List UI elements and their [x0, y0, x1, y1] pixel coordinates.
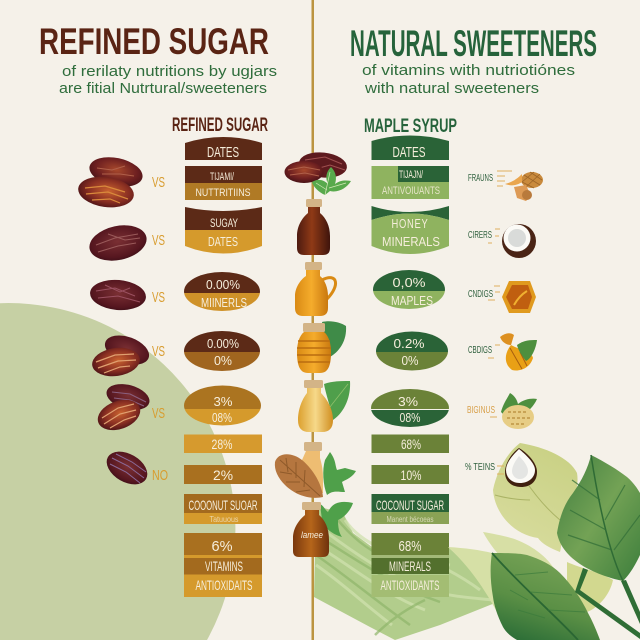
row: dates: DATES — [207, 144, 239, 161]
icon: peanut snack — [505, 172, 543, 201]
vs labels: NO — [152, 467, 168, 484]
title: refined sugar: REFINED SUGAR — [39, 21, 269, 62]
row: 3 percent ellipse: 3% — [214, 394, 233, 409]
row: coconut sugar: COCONUT SUGAR — [376, 497, 444, 513]
row: antioxidants: TIJAJN/ — [399, 169, 424, 181]
icon: amber jug — [295, 262, 336, 316]
subtitle: refined sugar — [59, 63, 277, 97]
side label: biginus: BIGINUS — [467, 405, 495, 416]
row: 68 percent: 68% — [401, 436, 421, 452]
icon: leaf on dates — [312, 167, 351, 195]
large dark leaf bottom — [491, 553, 600, 640]
side label: frauns: FRAUNS — [468, 173, 493, 184]
subtitle: refined sugar: of rerilaty nutritions by ugjars — [62, 63, 277, 80]
row: 0.00 percent ellipse — [184, 331, 262, 372]
row: 3 percent ellipse: 08% — [400, 410, 421, 425]
icon: turmeric and citrus — [500, 333, 537, 370]
row: coconut sugar — [372, 494, 449, 524]
icon: honey syrup jar: lamee — [301, 530, 323, 540]
row: nutritions: TIJAMI/ — [210, 171, 235, 183]
row: minerals and antioxidants — [372, 533, 449, 597]
vs labels: VS — [152, 289, 165, 306]
icon: leaves on jars — [320, 452, 356, 537]
vs labels: VS — [152, 174, 165, 191]
green brush stroke — [314, 506, 495, 640]
row: minerals ellipse: 0.00% — [206, 277, 240, 292]
row: 0.00 percent ellipse: 0.00% — [207, 336, 239, 351]
row: vitamins and antioxidants — [184, 533, 262, 597]
column heading: maple syrup: MAPLE SYRUP — [364, 116, 457, 137]
row: minerals and antioxidants: MINERALS — [389, 558, 431, 574]
row: coconut sugar: Tatuuous — [210, 515, 238, 524]
row: maples ellipse: 0,0% — [392, 275, 426, 290]
row: sugay dates — [185, 207, 262, 254]
row: vitamins and antioxidants: VITAMINS — [205, 558, 243, 574]
row: 0.00 percent ellipse: 0% — [214, 353, 232, 368]
motion dashes — [488, 171, 512, 474]
row: minerals ellipse: MIINERLS — [201, 295, 247, 310]
row: maples ellipse — [372, 270, 446, 310]
row: 3 percent ellipse — [371, 389, 449, 428]
side label: cirers: CIRERS — [468, 230, 492, 241]
row: 3 percent ellipse: 3% — [398, 394, 418, 409]
row: 10 percent — [372, 465, 449, 484]
subtitle: natural sweeteners: with natural sweeteners — [364, 80, 539, 97]
row: 0.2 percent ellipse — [375, 331, 449, 372]
side label: cndigs: CNDIGS — [468, 289, 493, 300]
leaf stems — [575, 568, 640, 639]
row: dates — [372, 136, 449, 161]
icon: pale jar behind almond — [302, 442, 323, 493]
row: dates — [185, 137, 262, 161]
icon: honey syrup jar — [293, 502, 329, 557]
icon: center dates — [284, 150, 348, 183]
icon: pale honey jar — [298, 380, 350, 432]
vs labels — [152, 174, 168, 484]
row: vitamins and antioxidants: 6% — [212, 538, 232, 555]
row: coconut sugar — [184, 494, 262, 524]
row: vitamins and antioxidants: ANTIOXIDAITS — [196, 577, 252, 593]
column heading: refined sugar: REFINED SUGAR — [172, 115, 268, 136]
icon: ginger pile with leaves — [501, 393, 537, 429]
row: honey minerals: HONEY — [392, 216, 428, 231]
icon: date 6 — [101, 445, 153, 491]
row: honey minerals — [372, 206, 449, 254]
row: sugay dates: DATES — [208, 234, 238, 249]
row: dates: DATES — [392, 144, 426, 161]
panel: refined sugar column — [184, 137, 262, 597]
icon: maple syrup bottle — [297, 199, 330, 255]
green circle backdrop — [0, 303, 235, 640]
icon: date 3 — [89, 278, 147, 312]
pale strip leaf — [448, 547, 497, 612]
row: 3 percent ellipse — [184, 385, 262, 426]
pale leaf right — [567, 562, 613, 612]
icon: almond — [275, 454, 323, 498]
large dark leaf top — [557, 455, 640, 581]
row: 28 percent: 28% — [212, 436, 232, 452]
pale leaf — [493, 443, 578, 552]
row: honey minerals: MINERALS — [382, 234, 440, 249]
row: 28 percent — [184, 434, 262, 453]
row: 0.2 percent ellipse: 0% — [402, 353, 419, 368]
vs labels: VS — [152, 232, 165, 249]
row: sugay dates: SUGAY — [210, 216, 238, 230]
row: minerals ellipse — [184, 272, 262, 312]
center divider line — [312, 0, 314, 640]
row: antioxidants — [372, 166, 449, 199]
row: nutritions: NUTTRITIINS — [196, 187, 250, 199]
side label: cbdigs: CBDIGS — [468, 345, 492, 356]
row: coconut sugar: Manent bécoeas — [386, 515, 434, 524]
row: 10 percent: 10% — [400, 467, 422, 483]
icon: dates pair 5 — [94, 380, 152, 436]
subtitle: refined sugar: are fitial Nutrtural/sweeteners — [59, 80, 267, 97]
row: 2 percent: 2% — [213, 467, 233, 483]
pale leaf behind — [483, 532, 587, 612]
row: minerals and antioxidants: ANTIOXIDANTS — [380, 577, 440, 593]
row: minerals and antioxidants: 68% — [398, 538, 422, 555]
icon: dates pair 1 — [76, 153, 145, 211]
icon: dates pair 4 — [90, 330, 153, 379]
icon: coconut — [502, 224, 536, 258]
side label: teins: % TEINS — [465, 462, 495, 473]
row: antioxidants: ANTIVOIUANTS — [382, 185, 440, 197]
icon: date 2 — [86, 220, 150, 266]
panel: natural sweeteners column — [371, 136, 449, 597]
subtitle: natural sweeteners: of vitamins with nutriotiónes — [362, 62, 575, 79]
row: coconut sugar: COOONUT SUOAR — [188, 497, 258, 513]
row: 2 percent — [184, 465, 262, 484]
icon: coconut half — [505, 448, 537, 487]
icon: honey hexagon — [502, 281, 536, 313]
vs labels: VS — [152, 343, 165, 360]
row: maples ellipse: MAPLES — [391, 293, 433, 308]
row: 0.2 percent ellipse: 0.2% — [394, 336, 425, 351]
row: 68 percent — [372, 434, 449, 453]
subtitle: natural sweeteners — [362, 62, 575, 97]
row: nutritions — [185, 166, 262, 200]
icon: ribbed honey jar — [297, 321, 346, 373]
vs labels: VS — [152, 405, 165, 422]
row: 3 percent ellipse: 08% — [212, 410, 232, 425]
